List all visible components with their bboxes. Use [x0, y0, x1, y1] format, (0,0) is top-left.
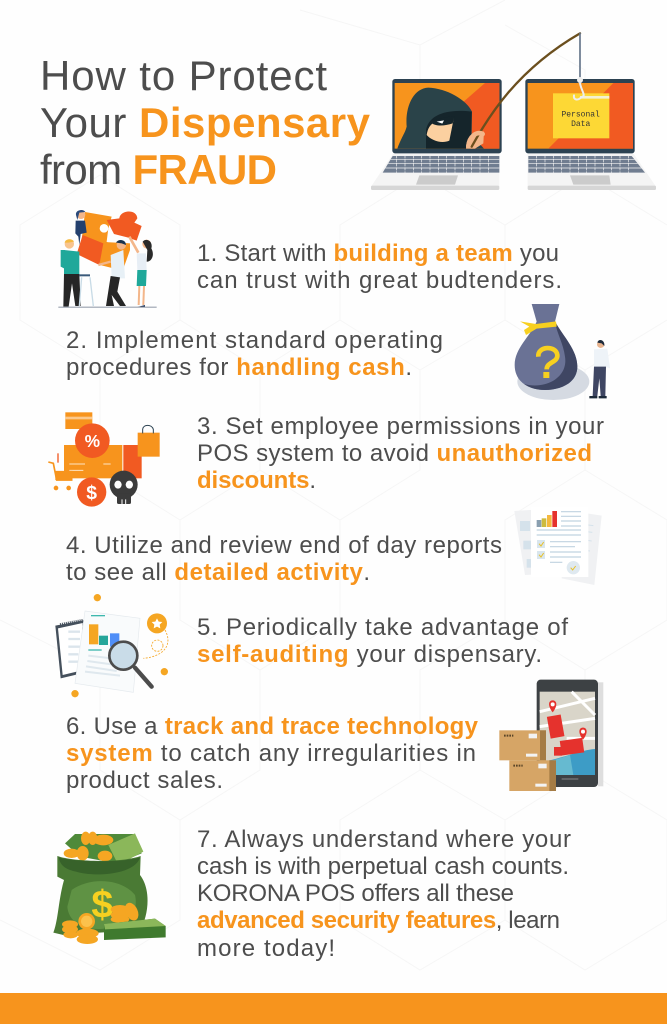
item 1 — [58, 210, 562, 308]
title — [40, 52, 371, 193]
text: step 5: 5. Periodically take advantage of — [197, 614, 568, 641]
item 5 — [55, 594, 568, 697]
text: step 3: POS system to avoid unauthorized — [197, 440, 592, 467]
text: step 2: procedures for handling cash. — [66, 354, 412, 381]
icon: discounts, cart and skull — [48, 412, 160, 507]
item 3 — [48, 412, 604, 507]
text: step 1 — [197, 240, 562, 294]
text: step 4: to see all detailed activity. — [66, 559, 370, 586]
item 2 — [66, 304, 610, 400]
text: step 3: discounts. — [197, 467, 316, 494]
text: step 6 — [66, 713, 479, 794]
icon: money bag with question mark — [515, 304, 610, 400]
title line 2: Your Dispensary — [40, 99, 371, 146]
icon: reports — [514, 506, 602, 585]
text: step 6: product sales. — [66, 767, 223, 794]
text: step 7: cash is with perpetual cash counts. — [197, 853, 569, 880]
text: step 7: 7. Always understand where your — [197, 826, 571, 853]
text: step 7: advanced security features, learn — [197, 907, 560, 934]
personal data note — [553, 93, 609, 138]
text: step 2: 2. Implement standard operating — [66, 327, 443, 354]
icon: discounts, cart and skull: $ — [86, 483, 97, 504]
text: step 7: more today! — [197, 935, 335, 962]
icon: bag of money: $ — [91, 882, 113, 926]
icon: discounts, cart and skull: % — [85, 431, 100, 451]
icon: team with puzzle — [58, 210, 157, 308]
item 4 — [66, 506, 602, 586]
text: step 4: 4. Utilize and review end of day reports — [66, 532, 502, 559]
left laptop — [371, 79, 502, 190]
icon: bag of money — [53, 832, 166, 944]
item 7 — [53, 826, 571, 962]
personal data note: Personal — [561, 111, 600, 120]
text: step 5: self-auditing your dispensary. — [197, 641, 542, 668]
right laptop — [525, 79, 656, 190]
title line 3: from FRAUD — [40, 146, 277, 193]
text: step 3 — [197, 413, 604, 494]
text: step 6: 6. Use a track and trace technology — [66, 713, 479, 740]
item 6 — [66, 680, 603, 794]
personal data note: Data — [571, 120, 590, 129]
text: step 7 — [197, 826, 571, 962]
text: step 5 — [197, 614, 568, 668]
footer bar — [0, 993, 667, 1024]
icon: audit with magnifier — [55, 594, 168, 697]
fishing rod and hook — [468, 33, 584, 147]
title line 1: How to Protect — [40, 52, 327, 99]
illustration: phishing laptops — [371, 33, 656, 190]
text: step 7: KORONA POS offers all these — [197, 880, 514, 907]
text: step 2 — [66, 327, 443, 381]
text: step 1: 1. Start with building a team you — [197, 240, 559, 267]
text: step 6: system to catch any irregularities in — [66, 740, 476, 767]
text: step 1: can trust with great budtenders. — [197, 267, 562, 294]
text: step 4 — [66, 532, 502, 586]
icon: phone map and parcels — [499, 680, 603, 791]
text: step 3: 3. Set employee permissions in your — [197, 413, 604, 440]
